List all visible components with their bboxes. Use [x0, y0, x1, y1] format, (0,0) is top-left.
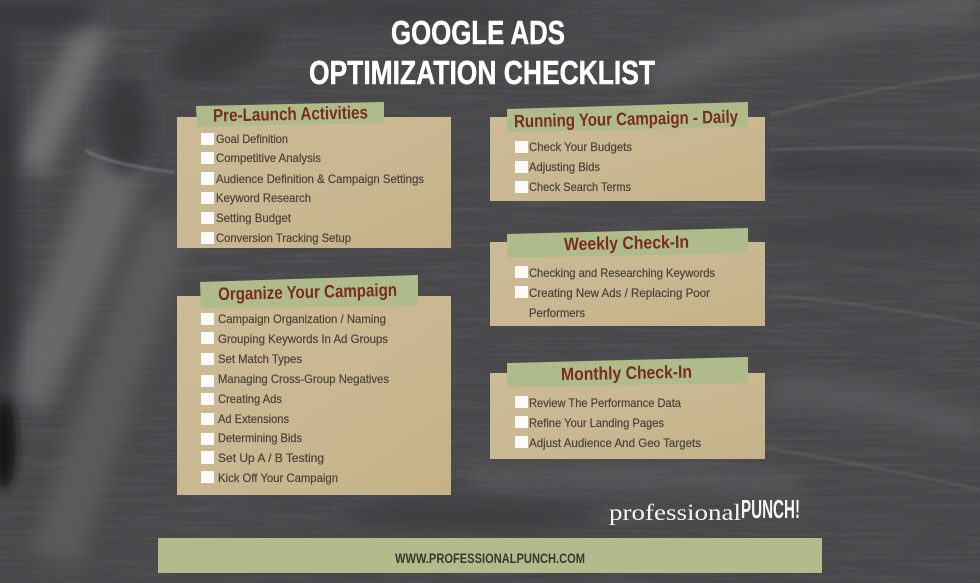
heading tab: monthly check-in: Monthly Check-In [561, 362, 692, 384]
checklist: organize your campaign: Determining Bids [218, 431, 302, 445]
checklist: monthly check-in: Review The Performance Data [529, 396, 681, 410]
website url: WWW.PROFESSIONALPUNCH.COM [395, 550, 585, 566]
checklist: monthly check-in [515, 396, 701, 450]
panel: weekly check-in [490, 228, 765, 326]
checklist: organize your campaign: Set Up A / B Testing [218, 451, 324, 465]
heading tab: organize your campaign [200, 275, 418, 308]
checklist: organize your campaign: Managing Cross-Group Negatives [218, 372, 389, 386]
checklist: weekly check-in [515, 266, 715, 320]
checklist: pre-launch activities: Audience Definition & Campaign Settings [216, 172, 424, 186]
panel: organize your campaign [177, 275, 451, 495]
checklist: weekly check-in: Performers [529, 306, 585, 320]
checklist: monthly check-in: Refine Your Landing Pages [529, 416, 664, 430]
heading tab: monthly check-in [507, 357, 748, 387]
checklist: organize your campaign: Creating Ads [218, 392, 282, 406]
checklist: running your campaign daily: Adjusting Bids [529, 160, 600, 174]
panel: running your campaign daily [490, 102, 765, 201]
checklist: weekly check-in: Checking and Researching Keywords [529, 266, 715, 280]
heading tab: pre-launch activities: Pre-Launch Activities [213, 102, 368, 126]
checklist: pre-launch activities: Setting Budget [216, 211, 292, 225]
checklist: pre-launch activities [201, 132, 424, 245]
panel: monthly check-in [490, 357, 765, 459]
checklist: weekly check-in: Creating New Ads / Replacing Poor [529, 286, 710, 300]
checklist: running your campaign daily: Check Your Budgets [529, 140, 632, 154]
heading tab: weekly check-in [507, 228, 748, 258]
checklist: pre-launch activities: Competitive Analysis [216, 151, 321, 165]
checklist: organize your campaign [201, 312, 389, 485]
checklist: running your campaign daily [515, 140, 632, 194]
title: OPTIMIZATION CHECKLIST [309, 54, 655, 91]
footer bar [158, 538, 822, 573]
checklist: pre-launch activities: Conversion Tracking Setup [216, 231, 351, 245]
checklist: running your campaign daily: Check Search Terms [529, 180, 631, 194]
heading tab: weekly check-in: Weekly Check-In [564, 232, 689, 254]
checklist: organize your campaign: Grouping Keywords In Ad Groups [218, 332, 388, 346]
checklist: organize your campaign: Kick Off Your Campaign [218, 471, 338, 485]
logo: professionalPUNCH!: PUNCH! [741, 494, 800, 524]
checklist: monthly check-in: Adjust Audience And Geo Targets [529, 436, 701, 450]
checklist: organize your campaign: Campaign Organization / Naming [218, 312, 386, 326]
title [309, 14, 655, 91]
logo: professionalPUNCH!: professional [609, 500, 741, 525]
checklist: pre-launch activities: Goal Definition [216, 132, 288, 146]
panel: pre-launch activities [177, 102, 451, 248]
heading tab: organize your campaign: Organize Your Campaign [218, 280, 397, 304]
title: GOOGLE ADS [391, 14, 565, 51]
logo: professionalPUNCH! [609, 494, 800, 525]
checklist: organize your campaign: Ad Extensions [218, 412, 289, 426]
heading tab: running your campaign daily: Running Your Campaign - Daily [514, 107, 738, 131]
checklist: organize your campaign: Set Match Types [218, 352, 302, 366]
checklist: pre-launch activities: Keyword Research [216, 191, 311, 205]
